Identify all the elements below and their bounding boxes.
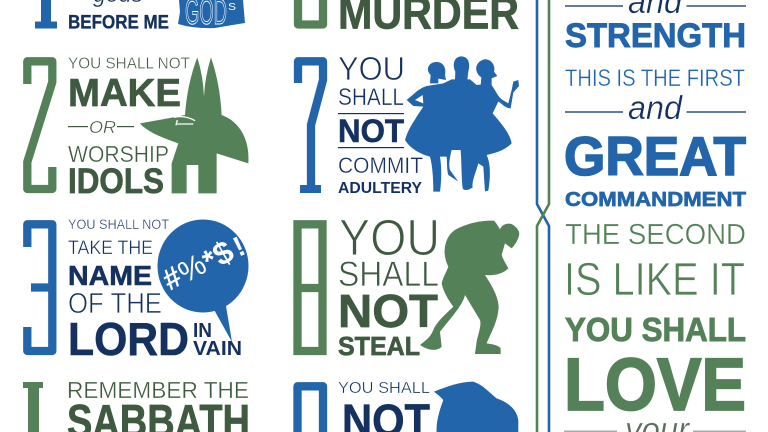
- divider: twisted double line: [537, 0, 549, 432]
- panel: commandment 3: [27, 217, 250, 365]
- panel: commandment 9: [298, 380, 518, 432]
- icon: anubis head: [140, 57, 248, 193]
- text: you shall not: YOU SHALL NOT: [68, 56, 190, 72]
- text: not: NOT: [338, 285, 438, 337]
- text: shall: SHALL: [338, 255, 439, 294]
- text: take the: TAKE THE: [68, 238, 153, 259]
- numeral 6: [298, 0, 323, 24]
- text: make: MAKE: [68, 72, 181, 115]
- text: you: YOU: [339, 209, 440, 266]
- rules around and: [565, 111, 746, 113]
- panel: commandment 7: [298, 51, 519, 197]
- text: adultery: ADULTERY: [338, 180, 423, 197]
- text: the second: THE SECOND: [565, 219, 746, 251]
- text: or with rules: [68, 117, 134, 137]
- numeral 3: [27, 224, 52, 351]
- text: and: and: [628, 89, 684, 126]
- panel: greatest commandment: [564, 0, 746, 432]
- text: of the: OF THE: [68, 288, 162, 320]
- text: you shall: YOU SHALL: [565, 312, 746, 349]
- panel: commandment 1: [35, 0, 245, 34]
- text: or with rules: OR: [89, 117, 116, 137]
- icon: gods banner: [178, 0, 245, 32]
- numeral 4: [23, 382, 43, 432]
- text: vain: VAIN: [193, 337, 242, 360]
- text: idols: IDOLS: [68, 162, 164, 201]
- text: you: YOU: [338, 51, 405, 88]
- icon: gods banner: S: [228, 2, 236, 13]
- text: censored symbols: %: [172, 248, 212, 290]
- rules around and: [565, 5, 746, 7]
- text: censored symbols: *: [197, 243, 224, 278]
- text: censored symbols: $: [206, 233, 240, 273]
- text: in: IN: [193, 319, 212, 342]
- icon: blue blob: [434, 382, 518, 432]
- text: remember the: REMEMBER THE: [67, 377, 249, 403]
- icon: thief silhouette: [420, 221, 519, 354]
- text: you shall not: YOU SHALL NOT: [68, 217, 169, 232]
- text: shall: SHALL: [338, 84, 404, 111]
- text: strength: STRENGTH: [565, 17, 746, 55]
- panel: commandment 4: [23, 377, 250, 432]
- rules around your: [564, 430, 746, 432]
- icon: three silhouettes: [405, 56, 519, 192]
- text: commandment: COMMANDMENT: [565, 189, 746, 211]
- numeral 8: [298, 224, 322, 351]
- text: lord: LORD: [68, 313, 189, 365]
- text: great: GREAT: [564, 125, 746, 187]
- text: censored symbols: #: [157, 260, 188, 297]
- text: not: NOT: [338, 113, 404, 149]
- numeral 7: [298, 61, 323, 193]
- numeral 9: [298, 386, 323, 432]
- rule: [338, 113, 404, 114]
- text: worship: WORSHIP: [68, 141, 169, 167]
- text: censored symbols: [157, 230, 250, 297]
- panel: commandment 2: [27, 56, 248, 201]
- text: name: NAME: [68, 260, 152, 291]
- text: you shall: YOU SHALL: [338, 380, 430, 397]
- panel: commandment 8: [298, 209, 519, 361]
- panel: commandment 6: [298, 0, 519, 38]
- numeral 2: [27, 61, 52, 189]
- text: love: LOVE: [564, 343, 746, 426]
- text: commit: COMMIT: [338, 153, 423, 178]
- rule: [338, 147, 404, 148]
- text: steal: STEAL: [338, 331, 420, 361]
- text: censored symbols: !: [228, 230, 250, 262]
- numeral 1: [35, 0, 57, 28]
- icon: speech bubble: [157, 220, 250, 342]
- text: before me: BEFORE ME: [68, 12, 169, 34]
